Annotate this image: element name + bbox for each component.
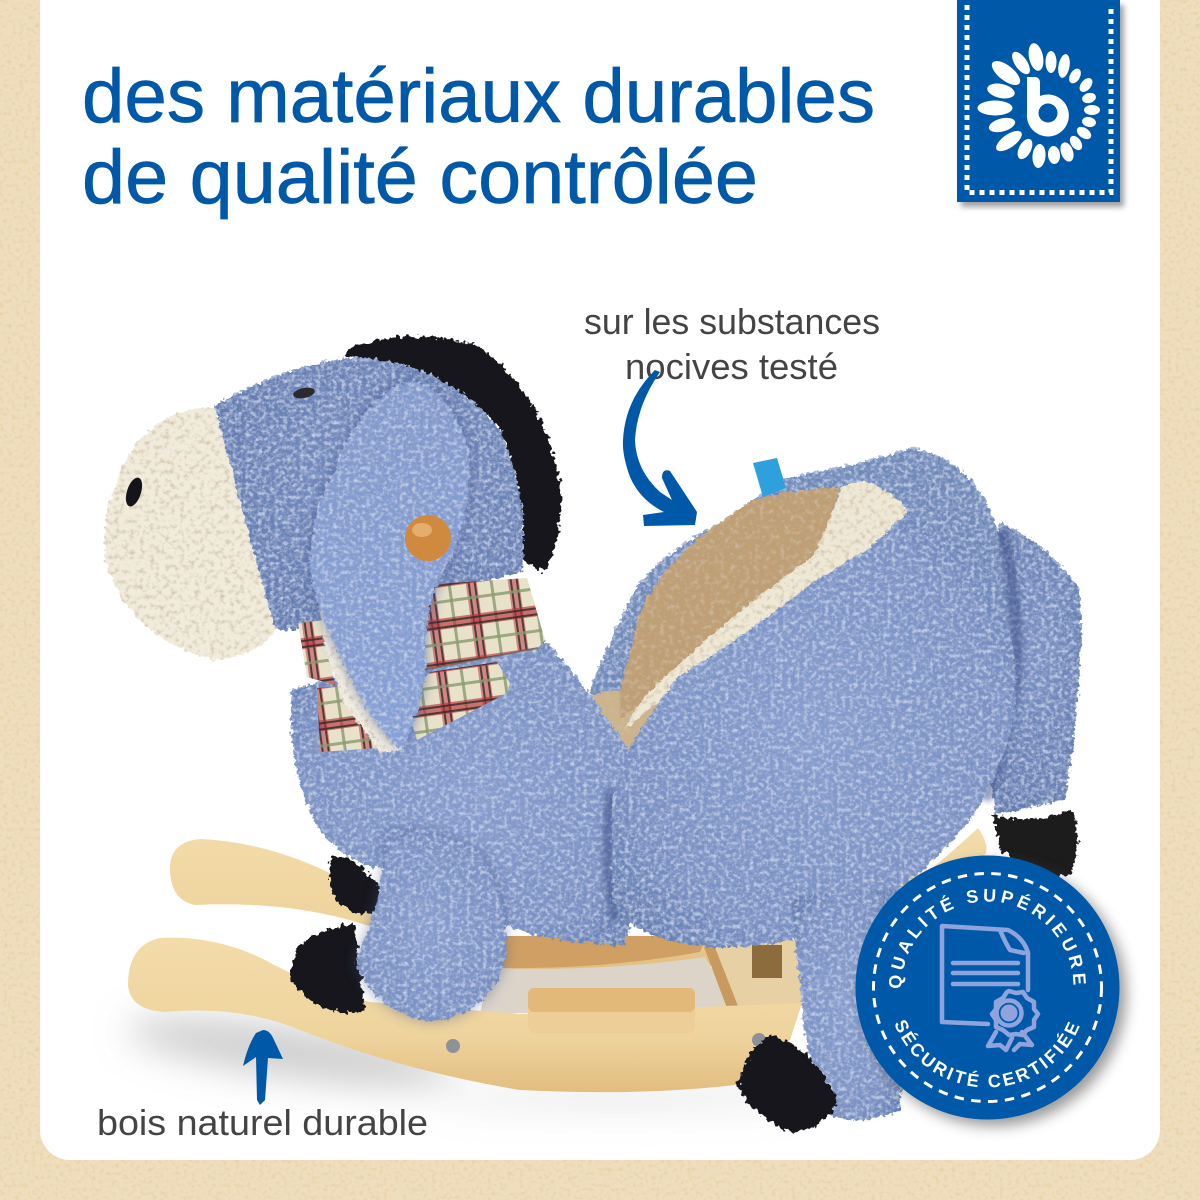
front leg	[355, 830, 506, 1022]
inner rocker platform	[480, 957, 735, 1014]
tail tuft	[993, 810, 1078, 878]
mane	[345, 336, 561, 572]
toy label tag	[753, 458, 786, 497]
callout: wood text: bois naturel durable	[97, 1102, 428, 1143]
ear lining	[318, 590, 404, 752]
under-belly shaded wood	[495, 936, 707, 968]
callout: substances text: sur les substances	[584, 301, 880, 342]
front leg hoof	[291, 925, 365, 1013]
far side of seat	[590, 448, 1018, 760]
rear back leg	[985, 522, 1081, 815]
badge: quality and safety seal	[854, 852, 1136, 1136]
title: des matériaux durables	[82, 54, 875, 139]
title	[82, 54, 875, 220]
callout: substances text: nocives testé	[625, 346, 838, 387]
arrow: to seat	[623, 370, 697, 526]
badge text: top: QUALITÉ SUPÉRIEURE	[889, 888, 1086, 988]
seat: tan plush	[620, 488, 840, 720]
rear leg	[790, 889, 905, 1120]
icon: certificate	[942, 926, 1038, 1050]
wooden support and block	[704, 940, 802, 1010]
head	[215, 357, 524, 630]
title: de qualité contrôlée	[82, 135, 758, 220]
nostril	[123, 476, 145, 508]
callout: substances text	[584, 301, 880, 387]
seat: tan cushion	[575, 690, 660, 775]
wooden ear knob	[405, 515, 451, 561]
ground shadow	[123, 1003, 810, 1107]
seat: cream lining	[625, 482, 907, 730]
wooden handle	[528, 988, 695, 1033]
rocker bolts	[446, 1033, 766, 1053]
back wooden rocker	[170, 828, 986, 971]
chest and belly	[291, 640, 660, 945]
front wooden rocker	[128, 938, 802, 1092]
muzzle	[104, 408, 275, 660]
badge text: bottom: SÉCURITÉ CERTIFIÉE	[895, 1020, 1080, 1088]
logo label: blue tag with flower b	[957, 0, 1124, 207]
arrow: to rocker	[243, 1030, 283, 1105]
ear	[309, 380, 470, 750]
rear hoof	[738, 1035, 838, 1132]
back hoof	[330, 857, 382, 913]
eye	[292, 386, 316, 400]
rear body	[612, 513, 1016, 947]
scarf	[298, 578, 545, 752]
donkey plush toy	[104, 336, 1081, 1132]
